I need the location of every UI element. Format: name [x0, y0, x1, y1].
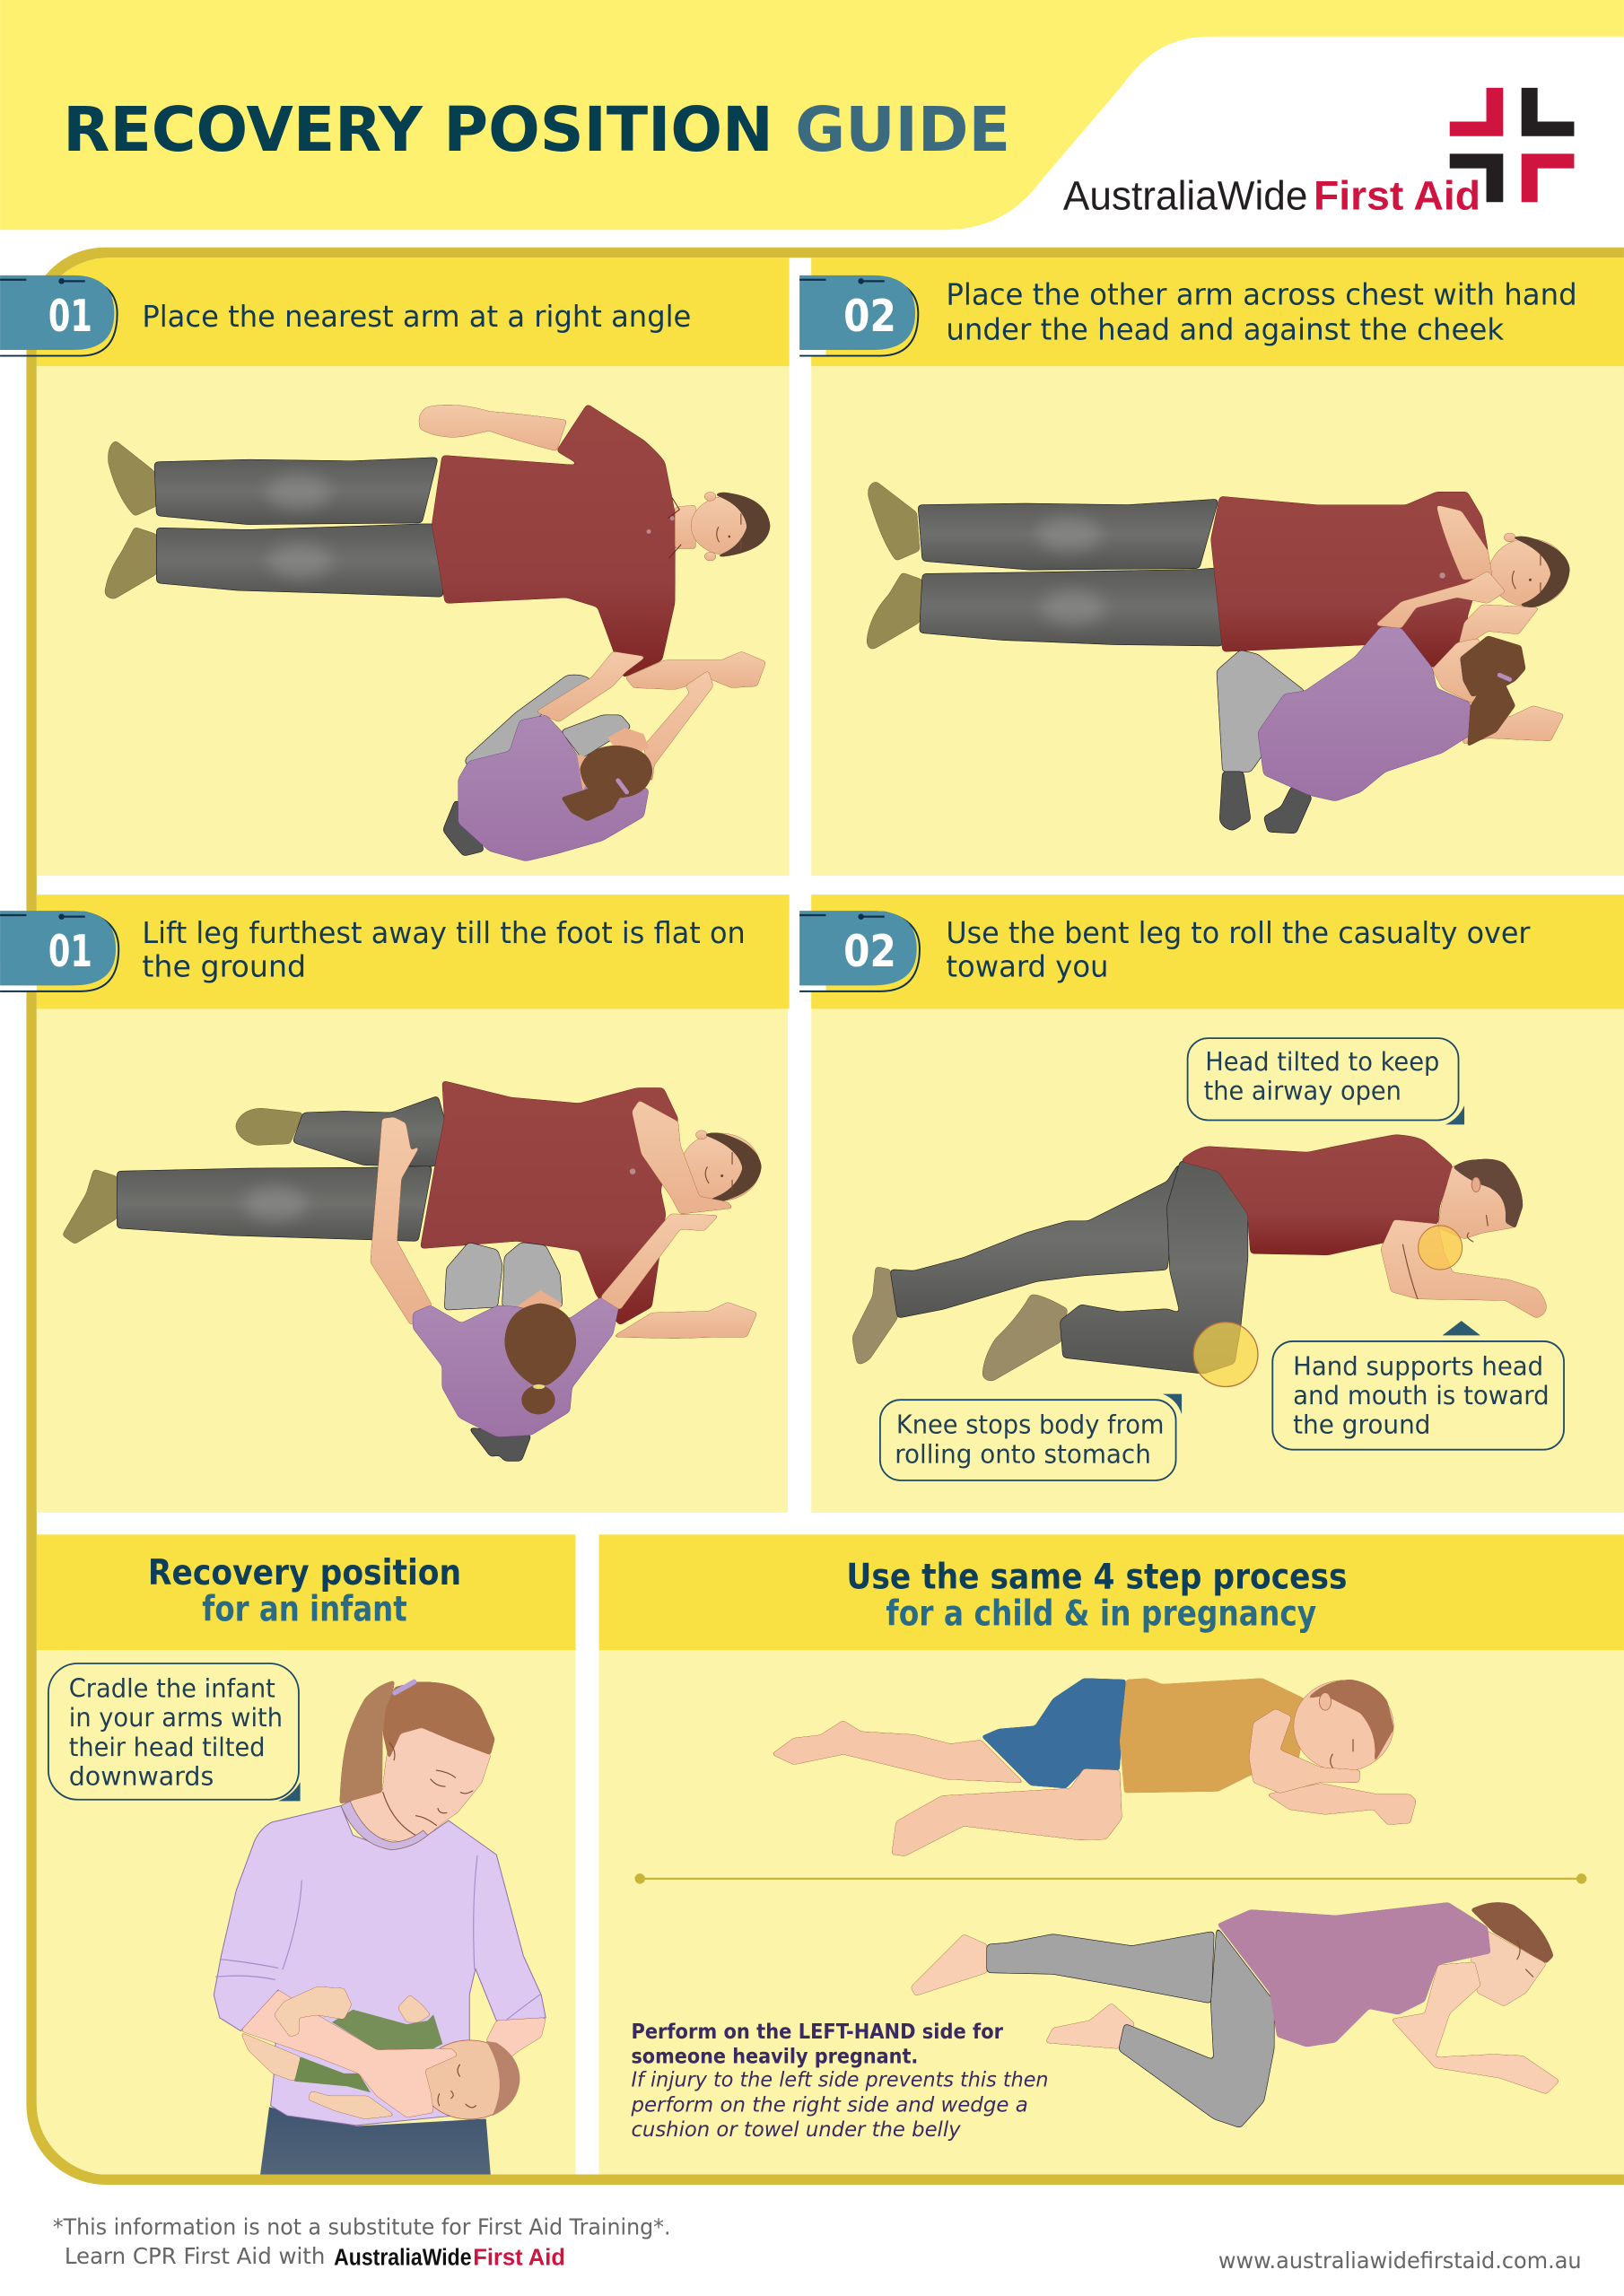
- badge 02 top: 02: [843, 291, 896, 342]
- child heading: [846, 1558, 1348, 1635]
- pregnancy note: If injury to the left side prevents this then: [631, 2069, 1049, 2092]
- callout: knee stops body: Knee stops body from: [896, 1410, 1164, 1440]
- step 4 body: [811, 1008, 1624, 1513]
- website url: www.australiawidefirstaid.com.au: [1218, 2248, 1582, 2274]
- child heading: for a child & in pregnancy: [886, 1594, 1316, 1635]
- callout: hand supports head: Hand supports head: [1293, 1350, 1543, 1381]
- step 2 heading: [946, 277, 1577, 347]
- infant heading: for an infant: [202, 1590, 407, 1630]
- step 4 heading: [946, 916, 1531, 984]
- footer disclaimer: [53, 2213, 671, 2271]
- step 2 header bar: [811, 258, 1624, 366]
- badge 01 top: [0, 275, 118, 356]
- pregnancy note: cushion or towel under the belly: [631, 2118, 961, 2142]
- callout: hand supports head: and mouth is toward: [1293, 1380, 1550, 1410]
- illustration: casualty in recovery position: [852, 1135, 1546, 1387]
- footer disclaimer: AustraliaWide: [334, 2244, 472, 2271]
- infant header bar: [37, 1534, 575, 1650]
- badge 02 middle: 02: [843, 926, 896, 977]
- callout: hand supports head: the ground: [1293, 1410, 1431, 1440]
- panel: step 2 other arm across chest: [811, 258, 1624, 876]
- callout: cradle the infant: their head tilted: [69, 1732, 265, 1762]
- panel: infant recovery position: [37, 1534, 575, 2175]
- callout: cradle the infant: in your arms with: [69, 1702, 283, 1733]
- step 1 heading: Place the nearest arm at a right angle: [142, 300, 691, 334]
- pregnancy note: [630, 2021, 1049, 2142]
- step 4 heading: Use the bent leg to roll the casualty over: [946, 916, 1531, 950]
- panel: step 3 lift leg: [37, 895, 790, 1513]
- step 2 heading: Place the other arm across chest with hand: [946, 277, 1577, 311]
- illustration: casualty flat with helper: [105, 404, 770, 861]
- step 1 body: [37, 366, 790, 876]
- footer disclaimer: *This information is not a substitute for First Aid Training*.: [53, 2213, 671, 2239]
- illustration: casualty with arm across chest and helper: [867, 482, 1570, 834]
- step 2 body: [811, 366, 1624, 876]
- step 4 heading: toward you: [946, 950, 1108, 984]
- step 4 header bar: [811, 895, 1624, 1008]
- logo: AustraliaWide: [1063, 172, 1307, 218]
- illustration: pregnant woman in recovery position: [911, 1902, 1559, 2127]
- callout: cradle the infant: Cradle the infant: [69, 1673, 275, 1704]
- child heading: Use the same 4 step process: [846, 1558, 1348, 1598]
- badge 02 middle: [799, 911, 920, 991]
- header banner: [0, 0, 1624, 230]
- panel: child and pregnancy: [599, 1534, 1624, 2175]
- pregnancy note: Perform on the LEFT-HAND side for: [631, 2021, 1004, 2044]
- step 3 heading: the ground: [142, 950, 306, 984]
- pregnancy note: perform on the right side and wedge a: [630, 2093, 1028, 2117]
- badge 01 middle: [0, 911, 118, 991]
- infant heading: Recovery position: [148, 1553, 461, 1593]
- footer disclaimer: Learn CPR First Aid with: [65, 2243, 325, 2269]
- infant heading: [148, 1553, 461, 1630]
- child body: [599, 1650, 1624, 2175]
- logo: First Aid: [1314, 172, 1480, 218]
- callout: head tilted: [1188, 1038, 1464, 1124]
- infant body: [37, 1650, 575, 2175]
- badge 02 top: [799, 275, 918, 356]
- step 3 heading: [142, 916, 746, 984]
- illustration: woman cradling infant: [214, 1681, 546, 2175]
- badge 01 middle: 01: [48, 926, 92, 977]
- step 2 heading: under the head and against the cheek: [946, 313, 1504, 347]
- callout: knee stops body: [880, 1394, 1182, 1480]
- illustration: child in recovery position: [772, 1678, 1416, 1855]
- callout: hand supports head: [1272, 1321, 1564, 1450]
- title: RECOVERY POSITION: [63, 94, 773, 166]
- child header bar: [599, 1534, 1624, 1650]
- step 3 body: [37, 1008, 788, 1513]
- pregnancy note: someone heavily pregnant.: [631, 2046, 918, 2069]
- callout: knee stops body: rolling onto stomach: [895, 1438, 1151, 1469]
- callout: head tilted: Head tilted to keep: [1205, 1046, 1439, 1077]
- step 3 heading: Lift leg furthest away till the foot is flat on: [142, 916, 746, 950]
- logo: [1063, 88, 1574, 218]
- panel: step 4 roll casualty: [811, 895, 1624, 1513]
- step 3 header bar: [37, 895, 790, 1008]
- callout: cradle the infant: [48, 1663, 301, 1801]
- badge 01 top: 01: [48, 291, 92, 342]
- callout: cradle the infant: downwards: [69, 1760, 214, 1791]
- title: GUIDE: [795, 94, 1010, 166]
- footer disclaimer: First Aid: [473, 2244, 565, 2271]
- illustration: casualty with leg bent and helper: [62, 1080, 762, 1461]
- panel: step 1 place nearest arm: [37, 258, 790, 876]
- divider line: [635, 1873, 1586, 1884]
- callout: head tilted: the airway open: [1204, 1076, 1401, 1106]
- step 1 header bar: [37, 258, 790, 366]
